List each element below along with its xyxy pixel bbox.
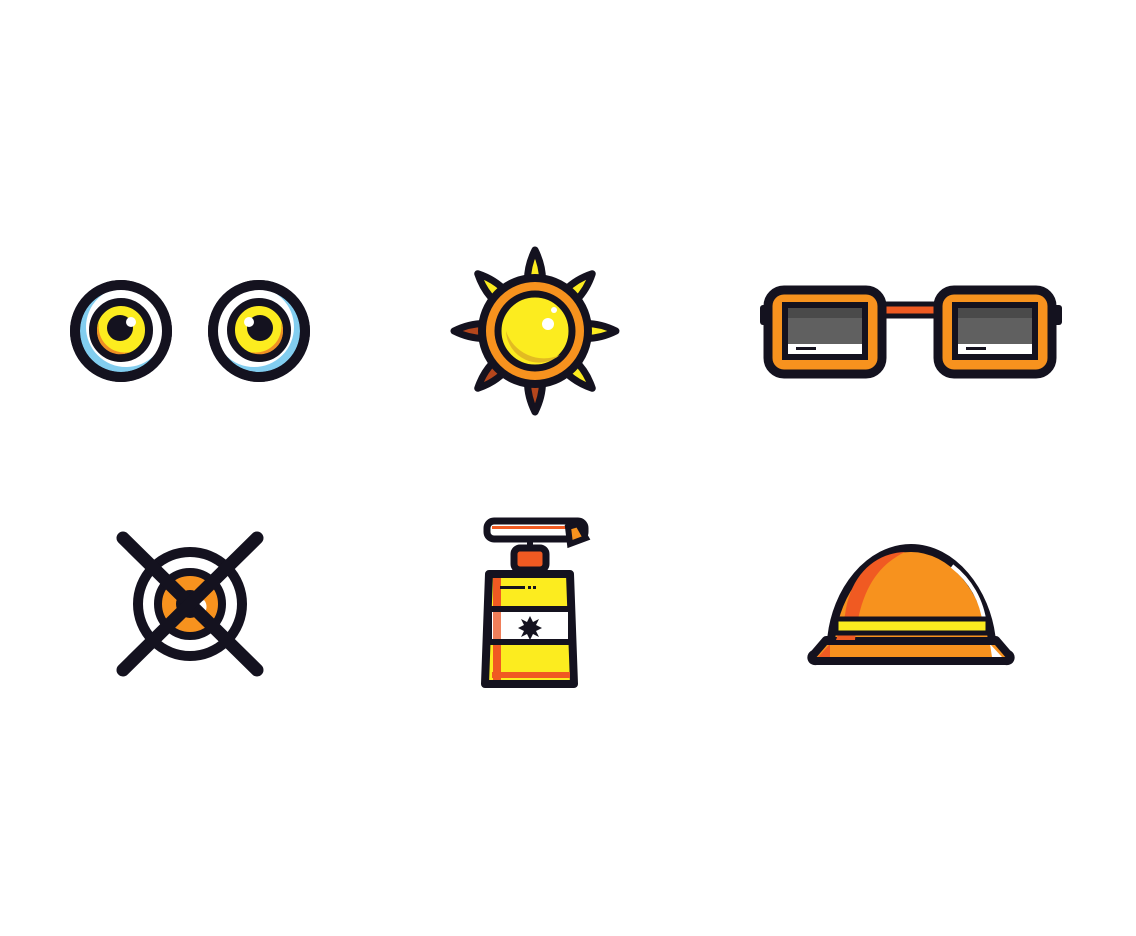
left eye: [75, 285, 167, 377]
icon: sunglasses: [760, 290, 1062, 374]
icon: sun: [454, 250, 616, 412]
icon: hat: [811, 548, 1011, 661]
icon: sunscreen bottle: [485, 521, 586, 684]
right eye: [213, 285, 305, 377]
icon: eyes: [75, 285, 305, 377]
icon: crossed eye: [123, 538, 257, 670]
